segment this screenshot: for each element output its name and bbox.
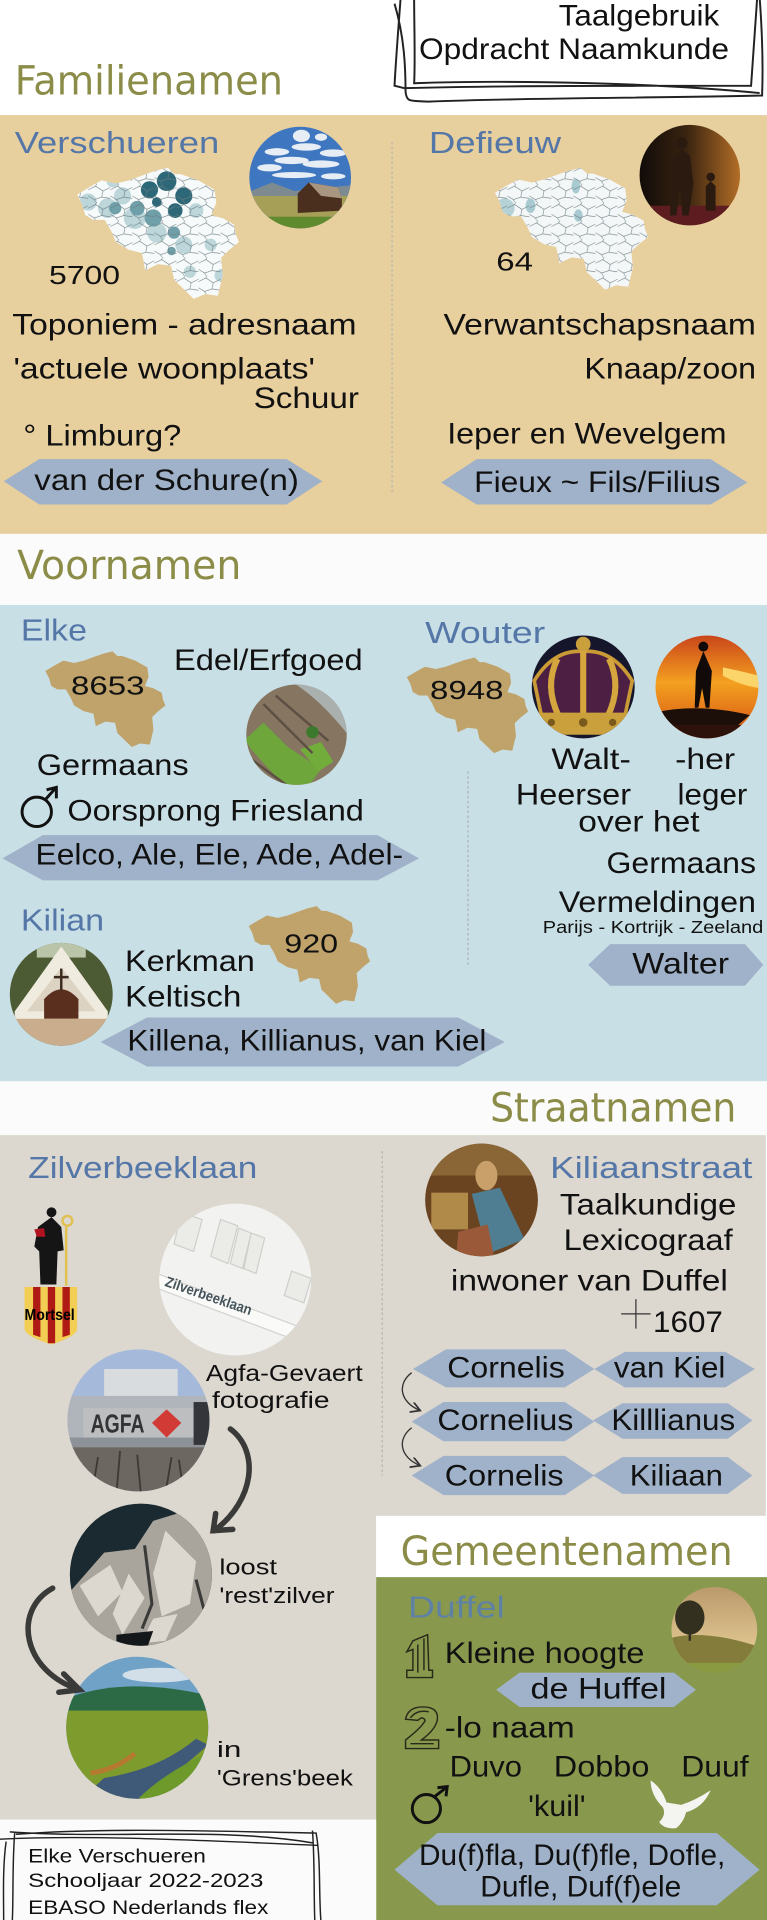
heading background: Gemeentenamen xyxy=(376,1516,767,1577)
photo: warrior xyxy=(654,634,762,742)
text: Agfa-Gevaert: Agfa-Gevaert xyxy=(206,1360,363,1386)
photo: Agfa factory: AGFA xyxy=(91,1411,145,1439)
tag: Eelco: Eelco, Ale, Ele, Ade, Adel- xyxy=(36,838,403,871)
icon: male symbol xyxy=(22,787,56,827)
text: Limburg: ° Limburg? xyxy=(23,420,181,453)
text: Taalkundige: Taalkundige xyxy=(560,1189,736,1222)
map: Defieuw distribution xyxy=(495,168,648,290)
top title area xyxy=(0,0,767,115)
heading: Straatnamen: Straatnamen xyxy=(490,1084,736,1132)
text: -lo naam: -lo naam xyxy=(445,1712,575,1745)
tag: van der Schure(n) xyxy=(4,459,322,504)
tag: Killena: Killena, Killianus, van Kiel xyxy=(127,1025,486,1058)
name: Elke: Elke xyxy=(21,613,87,647)
text: Duuf: Duuf xyxy=(681,1751,750,1784)
icon: Mortsel saint and shield xyxy=(25,1207,77,1344)
name: Duffel: Duffel xyxy=(408,1591,505,1625)
arrow: Cornelius to Cornelis xyxy=(402,1428,420,1466)
tag: Walter: Walter xyxy=(632,947,729,980)
text: Germaans: Germaans xyxy=(37,749,189,782)
panel: Familienamen xyxy=(0,115,767,534)
tag: van Kiel xyxy=(594,1352,755,1387)
text: Verwantschapsnaam: Verwantschapsnaam xyxy=(444,308,756,341)
tag: Killlianus xyxy=(593,1403,752,1439)
name: Zilverbeeklaan: Zilverbeeklaan xyxy=(28,1151,257,1185)
photo: crown xyxy=(529,634,637,742)
text: rest zilver: 'rest'zilver xyxy=(219,1583,334,1608)
tag: Fieux xyxy=(441,459,747,504)
credit line 3: EBASO Nederlands flex xyxy=(28,1897,269,1919)
text: Edel/Erfgoed: Edel/Erfgoed xyxy=(174,644,363,677)
tag: Duffel varianten xyxy=(395,1833,760,1905)
text: Oorsprong Friesland: Oorsprong Friesland xyxy=(67,794,364,827)
title line 1: Taalgebruik xyxy=(559,0,720,33)
tag: Duffel varianten: Du(f)fla, Du(f)fle, Dofle, xyxy=(419,1839,725,1872)
text: Toponiem: Toponiem - adresnaam xyxy=(12,308,357,341)
photo: father and child xyxy=(640,124,740,226)
text: Lexicograaf: Lexicograaf xyxy=(564,1224,734,1257)
tag: Duffel varianten: Dufle, Duf(f)ele xyxy=(480,1871,681,1904)
tag: de Huffel xyxy=(496,1672,696,1707)
tag: de Huffel: de Huffel xyxy=(531,1672,667,1705)
panel: Straatnamen xyxy=(0,1135,766,1820)
map: Kilian xyxy=(249,906,370,1004)
photo: Agfa factory xyxy=(65,1347,214,1494)
heading: Familienamen: Familienamen xyxy=(15,56,283,104)
text: Germaans Wouter: Germaans xyxy=(606,847,756,880)
heading: Voornamen: Voornamen xyxy=(17,541,241,589)
icon: death cross xyxy=(621,1299,651,1329)
map: Verschueren distribution xyxy=(74,165,245,302)
arrow: silver to river xyxy=(28,1588,80,1692)
tag: Cornelius xyxy=(412,1402,594,1441)
text: over het: over het xyxy=(578,805,700,838)
tag: Kiliaan: Kiliaan xyxy=(630,1459,723,1492)
photo: scholar xyxy=(423,1141,540,1261)
tag: van der Schure(n): van der Schure(n) xyxy=(34,464,299,497)
tag: Killena xyxy=(100,1018,505,1067)
tag: Cornelis: Cornelis xyxy=(447,1352,565,1385)
tag: van Kiel: van Kiel xyxy=(614,1352,725,1385)
panel: Voornamen xyxy=(0,605,767,1081)
text: Grensbeek: 'Grens'beek xyxy=(217,1765,354,1790)
text: fotografie: fotografie xyxy=(212,1387,330,1413)
icon: number 1 xyxy=(407,1635,433,1678)
tag: Cornelis 2 xyxy=(412,1456,594,1495)
text: 1607: 1607 xyxy=(653,1306,723,1339)
count: 64: 64 xyxy=(496,249,533,277)
text: Ieper en Wevelgem: Ieper en Wevelgem xyxy=(447,417,727,450)
text: Duvo: Duvo xyxy=(450,1751,522,1784)
arrow: Cornelis to Cornelius xyxy=(402,1373,420,1411)
text: kuil: 'kuil' xyxy=(528,1790,586,1823)
map: Wouter xyxy=(407,658,528,753)
photo: hill xyxy=(669,1586,760,1675)
text: Kerkman: Kerkman xyxy=(125,945,255,978)
text: Schuur: Schuur xyxy=(254,382,359,415)
map: Elke: 8653 xyxy=(71,672,145,700)
tag: Cornelis 2: Cornelis xyxy=(445,1459,564,1492)
credit line 2: Schooljaar 2022-2023 xyxy=(28,1870,264,1892)
tag: Kiliaan xyxy=(593,1457,752,1494)
heading: Gemeentenamen: Gemeentenamen xyxy=(401,1527,733,1575)
map: Kilian: 920 xyxy=(284,931,338,959)
count: 5700: 5700 xyxy=(49,262,120,290)
text: -her: -her xyxy=(675,743,735,776)
text: plaatsen: Parijs - Kortrijk - Zeeland xyxy=(543,917,763,937)
name: Kiliaanstraat: Kiliaanstraat xyxy=(550,1151,753,1185)
icon: male symbol xyxy=(412,1787,447,1823)
text: loost: loost xyxy=(219,1555,277,1580)
text: Kleine hoogte: Kleine hoogte xyxy=(445,1637,644,1670)
icon: dove xyxy=(651,1780,711,1828)
text: Knaap/zoon: Knaap/zoon xyxy=(584,352,756,385)
photo: chapel xyxy=(7,940,115,1048)
photo: river xyxy=(64,1654,211,1806)
title line 2: Opdracht Naamkunde xyxy=(419,33,729,66)
label: Mortsel: Mortsel xyxy=(25,1307,75,1324)
text: inwoner van Duffel: inwoner van Duffel xyxy=(451,1265,728,1298)
text: actuele woonplaats: 'actuele woonplaats' xyxy=(13,352,315,385)
text: in: in xyxy=(217,1737,241,1762)
credit line 1: Elke Verschueren xyxy=(28,1845,206,1867)
photo: street map: Zilverbeeklaan xyxy=(163,1274,254,1319)
title box xyxy=(395,0,763,102)
name: Wouter: Wouter xyxy=(425,616,545,650)
text: Vermeldingen: Vermeldingen xyxy=(559,886,756,919)
map: Wouter: 8948 xyxy=(430,677,504,705)
photo: terraces xyxy=(245,683,348,786)
text: Heerser: Heerser xyxy=(516,778,631,811)
photo: barn xyxy=(249,126,351,228)
text: leger: leger xyxy=(678,778,748,811)
text: Dobbo: Dobbo xyxy=(554,1751,649,1784)
tag: Walter xyxy=(588,944,763,986)
tag: Cornelis xyxy=(413,1349,594,1387)
tag: Eelco xyxy=(2,835,419,880)
text: Walt-: Walt- xyxy=(551,743,631,776)
arrow: Agfa to silver xyxy=(213,1429,249,1531)
name: Kilian: Kilian xyxy=(21,904,104,938)
name: Defieuw: Defieuw xyxy=(429,126,562,160)
panel: Gemeentenamen xyxy=(376,1577,767,1920)
text: Keltisch: Keltisch xyxy=(125,981,241,1014)
photo: street map xyxy=(157,1201,314,1358)
map: Elke xyxy=(45,651,165,747)
tag: Cornelius: Cornelius xyxy=(437,1404,573,1437)
tag: Killlianus: Killlianus xyxy=(611,1404,735,1437)
name: Verschueren: Verschueren xyxy=(15,126,219,160)
credits box xyxy=(0,1820,376,1920)
tag: Fieux: Fieux ~ Fils/Filius xyxy=(474,466,720,499)
icon: number 2 xyxy=(406,1707,439,1749)
photo: silver xyxy=(67,1501,214,1648)
